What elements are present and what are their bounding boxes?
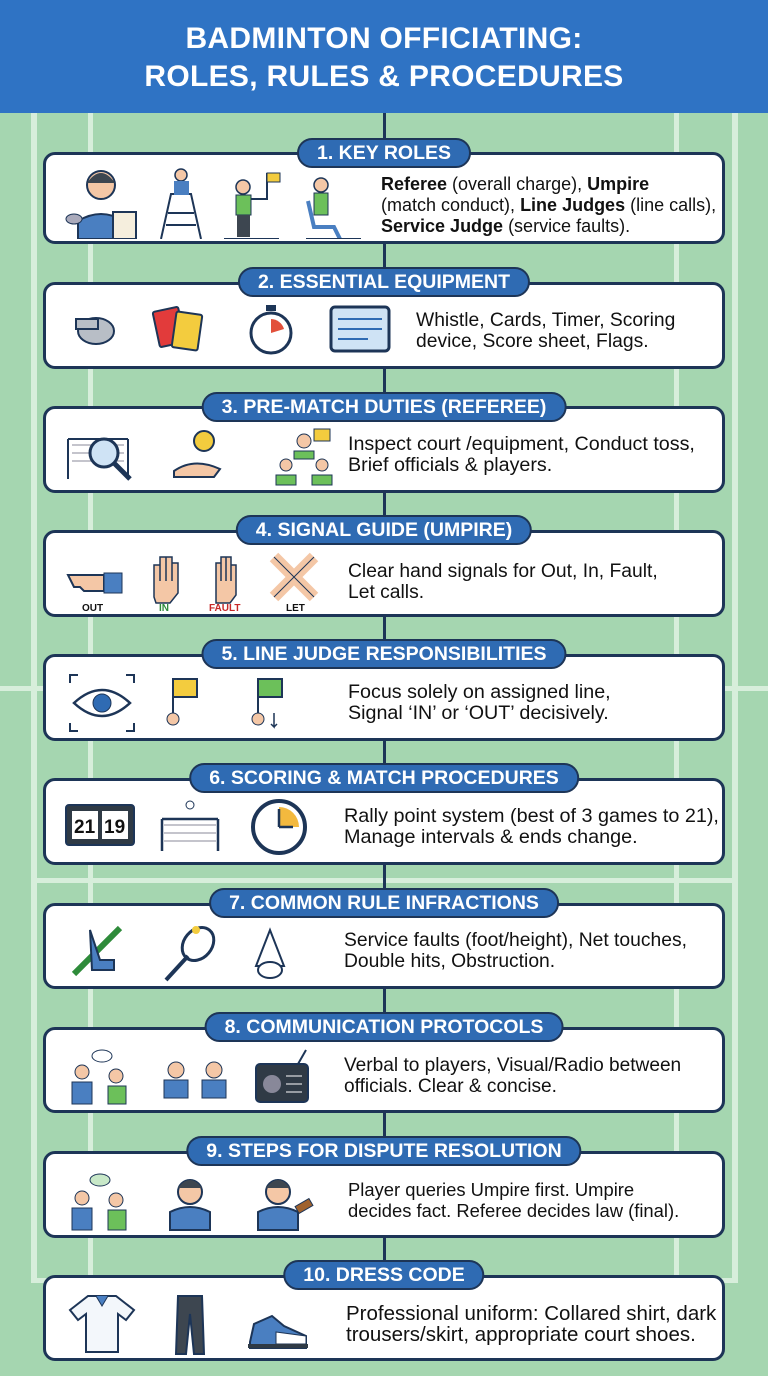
icons: equipment [75, 305, 390, 354]
text: dress: trousers/skirt, appropriate court shoes. [346, 1323, 696, 1346]
icons: signals: FAULT [209, 603, 240, 614]
heading: 8 [205, 1012, 563, 1042]
text: pre-match: Brief officials & players. [348, 454, 552, 476]
heading: 10 [283, 1260, 485, 1290]
heading: 2 [238, 267, 530, 297]
heading: 4: 4. SIGNAL GUIDE (UMPIRE) [256, 519, 512, 541]
text: roles: Service Judge (service faults). [381, 216, 630, 236]
heading: 5: 5. LINE JUDGE RESPONSIBILITIES [221, 643, 547, 665]
text: infractions: Double hits, Obstruction. [344, 951, 555, 972]
text: dispute: Player queries Umpire first. Umpire [348, 1179, 634, 1200]
icons: scoring: 19 [104, 817, 125, 838]
text: scoring: Rally point system (best of 3 games to 21), [344, 805, 719, 827]
text: signals: Clear hand signals for Out, In, Fault, [348, 561, 658, 582]
text: roles [381, 174, 716, 236]
text: scoring [344, 805, 719, 848]
text: equipment: Whistle, Cards, Timer, Scoring [416, 310, 675, 331]
heading: 7 [209, 888, 559, 918]
text: communication [344, 1055, 681, 1097]
text: dispute: decides fact. Referee decides law (final). [348, 1200, 679, 1221]
panel: 5 line judge [43, 654, 725, 741]
panel: 3 pre-match [43, 406, 725, 493]
heading: 3 [202, 392, 566, 422]
icons: dispute [72, 1174, 314, 1231]
heading: 1 [297, 138, 471, 168]
icons: dress [68, 1295, 308, 1355]
icons: scoring [65, 799, 307, 855]
icons: infractions [72, 926, 286, 982]
heading: 2: 2. ESSENTIAL EQUIPMENT [258, 271, 510, 293]
heading: 5 [201, 639, 567, 669]
text: equipment [416, 310, 675, 352]
text: communication: Verbal to players, Visual/Radio between [344, 1055, 681, 1076]
text: infractions: Service faults (foot/height), Net touches, [344, 930, 687, 951]
icons: roles [66, 168, 361, 239]
heading: 6 [189, 763, 579, 793]
panel: 2 equipment [43, 282, 725, 369]
text: signals: Let calls. [348, 582, 424, 603]
title [0, 0, 768, 113]
panel: 1 key roles [43, 152, 725, 244]
heading: 9: 9. STEPS FOR DISPUTE RESOLUTION [206, 1140, 562, 1162]
icons: signals: OUT [82, 603, 103, 614]
heading: 9 [186, 1136, 582, 1166]
text: scoring: Manage intervals & ends change. [344, 826, 638, 848]
text: roles: Referee (overall charge), Umpire [381, 174, 649, 194]
text: dress [346, 1302, 716, 1346]
panel: 10 dress code [43, 1275, 725, 1361]
heading: 1: 1. KEY ROLES [317, 142, 451, 164]
icons: signals: IN [159, 603, 169, 614]
heading: 6: 6. SCORING & MATCH PROCEDURES [209, 767, 559, 789]
panel: 7 infractions [43, 903, 725, 989]
text: infractions [344, 930, 687, 972]
title: ROLES, RULES & PROCEDURES [144, 60, 624, 93]
text: line judge: Focus solely on assigned line, [348, 681, 611, 703]
heading: 3: 3. PRE-MATCH DUTIES (REFEREE) [222, 396, 546, 418]
text: equipment: device, Score sheet, Flags. [416, 331, 649, 352]
text: dress: Professional uniform: Collared shirt, dark [346, 1302, 716, 1325]
heading: 7: 7. COMMON RULE INFRACTIONS [229, 892, 539, 914]
icons: pre-match [67, 428, 332, 486]
icons: scoring: 21 [74, 817, 96, 838]
text: signals [348, 561, 658, 603]
heading: 8: 8. COMMUNICATION PROTOCOLS [225, 1016, 543, 1038]
icons: signals [66, 552, 318, 614]
panel: 9 dispute [43, 1151, 725, 1238]
text: pre-match: Inspect court /equipment, Conduct toss, [348, 433, 695, 455]
text: communication: officials. Clear & concise. [344, 1076, 557, 1097]
text: pre-match [348, 433, 695, 476]
heading: 4 [236, 515, 532, 545]
icons: signals: LET [286, 603, 305, 614]
text: line judge [348, 681, 611, 724]
text: line judge: Signal ‘IN’ or ‘OUT’ decisively. [348, 702, 609, 724]
text: dispute [348, 1179, 679, 1221]
icons: line judge [69, 674, 283, 732]
text: roles: (match conduct), Line Judges (line calls), [381, 195, 716, 215]
panel: 8 communication [43, 1027, 725, 1113]
icons: communication [72, 1050, 309, 1104]
panel: 4 signals [43, 530, 725, 617]
panel: 6 scoring [43, 778, 725, 865]
title: BADMINTON OFFICIATING: [185, 22, 583, 55]
heading: 10: 10. DRESS CODE [303, 1264, 465, 1286]
